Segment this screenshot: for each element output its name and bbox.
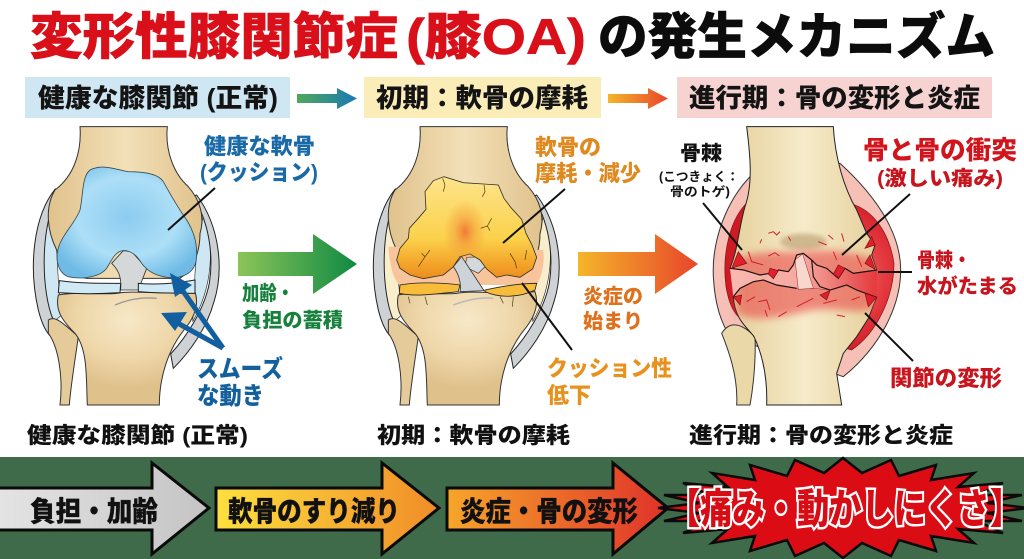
label: onset of inflammation: 炎症の xyxy=(583,285,643,308)
stage header: early xyxy=(364,77,601,118)
inflamed joint space xyxy=(388,247,544,285)
arrows: smooth movement xyxy=(161,273,223,348)
panel: early stage knee illustration xyxy=(373,127,559,405)
flow arrow: load and ageing: 負担・加齢 xyxy=(30,496,158,527)
panel: healthy knee illustration xyxy=(33,127,219,405)
arrow: healthy to early xyxy=(238,234,357,294)
tibia xyxy=(733,280,877,405)
flow arrow: inflammation and bone deformity: 炎症・骨の変形 xyxy=(460,496,638,527)
label: healthy cartilage: 健康な軟骨 xyxy=(204,134,315,159)
caption: healthy: 健康な膝関節 (正常) xyxy=(27,423,248,448)
stage header: healthy: 健康な膝関節 (正常) xyxy=(38,83,278,113)
worn meniscus left xyxy=(399,283,460,295)
label: spurs and fluid xyxy=(917,249,1018,298)
leader line: reduced cushioning xyxy=(522,283,572,350)
fibula xyxy=(722,325,755,405)
label: ageing and load xyxy=(242,282,343,332)
flow arrow: cartilage wear: 軟骨のすり減り xyxy=(228,496,400,527)
label: osteophyte: 骨のトゲ) xyxy=(670,184,730,199)
panel: advanced knee illustration xyxy=(713,127,901,405)
capsule outer xyxy=(713,163,901,377)
flow arrow: load and ageing xyxy=(0,463,209,554)
label: cartilage wear: 摩耗・減少 xyxy=(535,161,641,186)
label: spurs and fluid: 水がたまる xyxy=(917,274,1018,298)
flow arrow: inflammation and bone deformity xyxy=(447,463,668,554)
title: の発生メカニズム xyxy=(598,9,995,65)
meniscus left xyxy=(58,281,121,294)
leader lines: advanced xyxy=(703,194,913,361)
label: cartilage wear: 軟骨の xyxy=(535,135,601,160)
label: bone collision: 骨と骨の衝突 xyxy=(863,137,1017,165)
cartilage: worn yellow xyxy=(397,177,537,279)
capsule inflamed xyxy=(725,200,894,350)
cracks xyxy=(747,232,862,317)
title: 変形性膝関節症 xyxy=(30,9,398,65)
stage header: advanced: 進行期：骨の変形と炎症 xyxy=(689,83,980,113)
label: onset of inflammation xyxy=(583,285,643,333)
ligament xyxy=(795,254,813,289)
ligament band xyxy=(453,257,484,292)
label: spurs and fluid: 骨棘・ xyxy=(917,249,971,272)
label: reduced cushioning xyxy=(547,356,672,408)
leader line: healthy cartilage xyxy=(168,188,215,230)
femur xyxy=(730,127,877,278)
ligaments xyxy=(465,257,485,273)
arrow: early to advanced xyxy=(578,234,698,294)
label: smooth movement: な動き xyxy=(197,383,264,410)
label: joint deformity: 関節の変形 xyxy=(890,366,1002,391)
label: bone collision: (激しい痛み) xyxy=(877,167,1003,190)
label: healthy cartilage: (クッション) xyxy=(200,160,318,185)
inflamed haze xyxy=(735,250,877,318)
label: bone collision xyxy=(863,137,1017,190)
label: ageing and load: 加齢・ xyxy=(242,282,294,305)
title: (膝OA) xyxy=(406,9,586,65)
arrow: header early to advanced xyxy=(608,88,668,109)
title xyxy=(30,9,995,65)
cartilage: healthy blue xyxy=(57,167,197,278)
starburst: pain and stiffness xyxy=(658,458,1024,558)
meniscus right xyxy=(138,280,195,293)
joint gap xyxy=(730,253,877,297)
label: reduced cushioning: クッション性 xyxy=(547,356,672,381)
label: osteophyte: 骨棘 xyxy=(680,142,722,165)
grey wear area xyxy=(780,234,827,250)
label: ageing and load: 負担の蓄積 xyxy=(242,308,343,332)
label: healthy cartilage xyxy=(200,134,318,185)
label: osteophyte xyxy=(659,142,739,199)
label: smooth movement: スムーズ xyxy=(197,355,283,383)
label: smooth movement xyxy=(197,355,283,410)
bottom banner xyxy=(0,457,1024,559)
ligaments xyxy=(112,251,147,290)
label: onset of inflammation: 始まり xyxy=(583,310,643,333)
arrow: header healthy to early xyxy=(297,88,357,109)
jagged bone edges xyxy=(730,253,877,297)
stage header: early: 初期：軟骨の摩耗 xyxy=(376,83,588,113)
stage header: healthy xyxy=(25,77,290,118)
bone spurs xyxy=(732,237,877,307)
flow arrow: cartilage wear xyxy=(216,463,439,554)
caption: advanced: 進行期：骨の変形と炎症 xyxy=(689,423,953,448)
worn meniscus right xyxy=(485,283,537,296)
label: osteophyte: (こつきょく： xyxy=(659,170,739,184)
stage header: advanced xyxy=(677,77,992,118)
label: reduced cushioning: 低下 xyxy=(547,383,591,408)
caption: early: 初期：軟骨の摩耗 xyxy=(377,423,570,448)
label: cartilage wear xyxy=(535,135,641,186)
leader line: worn cartilage xyxy=(503,189,565,243)
